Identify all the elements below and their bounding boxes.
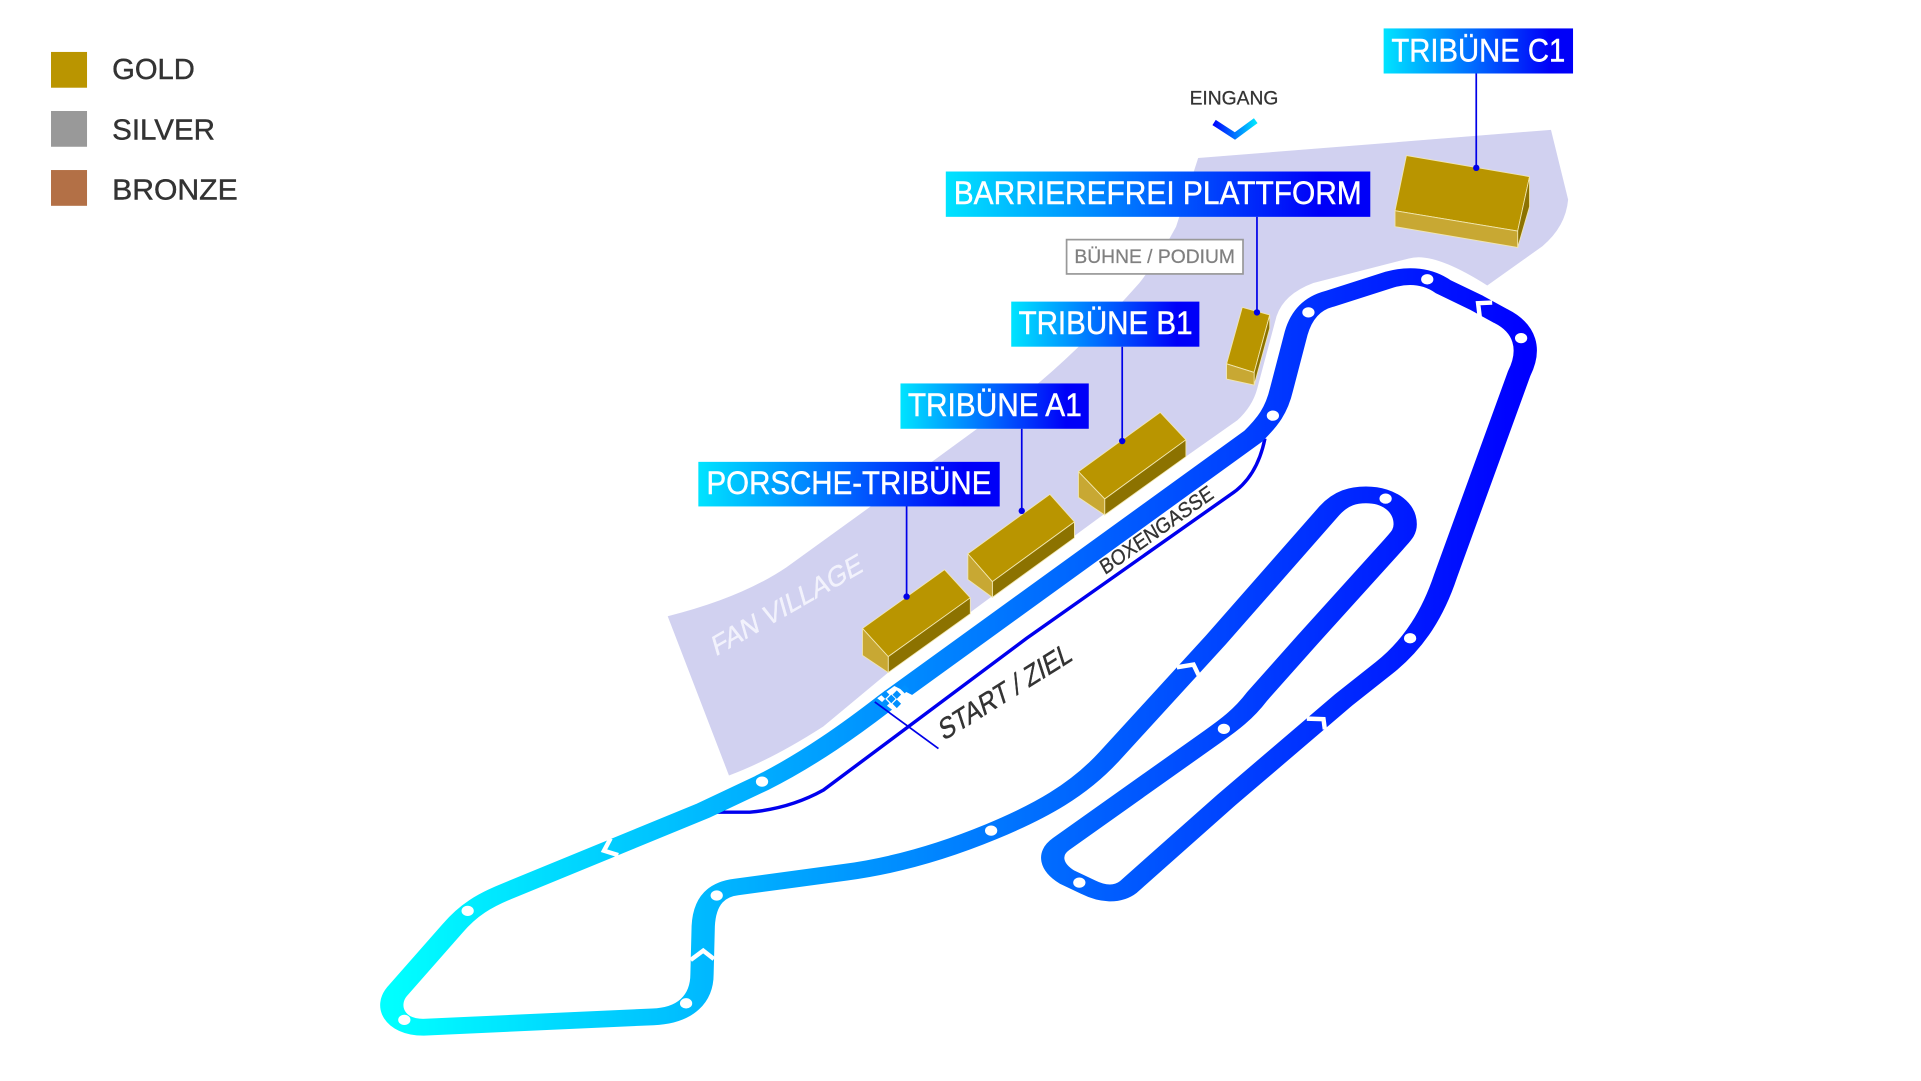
legend item: gold — [51, 52, 195, 88]
text: eingang: EINGANG — [1190, 89, 1278, 110]
label: porsche-tribüne — [698, 462, 1000, 600]
grandstand: a1 — [968, 494, 1074, 597]
text: boxengasse: BOXENGASSE — [1096, 481, 1217, 580]
label: barrierefrei plattform — [946, 172, 1370, 316]
entrance — [1190, 89, 1278, 136]
legend item: bronze — [51, 170, 238, 206]
icon: entrance chevron — [1214, 121, 1256, 136]
legend item: silver: SILVER — [112, 114, 215, 146]
arrow: back straight — [1307, 719, 1325, 729]
turn markers — [398, 274, 1527, 1025]
race track — [392, 277, 1525, 1027]
text: start / ziel: START / ZIEL — [936, 636, 1075, 748]
label: tribüne b1 — [1011, 302, 1199, 444]
arrow: inner straight — [1177, 665, 1199, 675]
label: tribüne a1: TRIBÜNE A1 — [908, 387, 1082, 423]
grandstand: b1 — [1078, 412, 1186, 515]
label: tribüne a1 — [900, 383, 1089, 514]
start finish flag — [877, 685, 914, 711]
legend — [51, 52, 238, 206]
arrow: left straight — [604, 838, 618, 855]
stage label — [1067, 240, 1243, 274]
pit lane — [717, 439, 1265, 812]
grandstand: accessible platform — [1227, 307, 1270, 385]
start line marker — [875, 702, 938, 749]
label: barrierefrei plattform: BARRIEREFREI PLATTFORM — [954, 175, 1362, 211]
legend item: gold: GOLD — [112, 54, 195, 86]
arrow: top corner — [1478, 303, 1492, 319]
arrow: lower chicane — [691, 951, 714, 960]
direction arrows — [604, 303, 1492, 960]
grandstand: c1 — [1395, 156, 1530, 247]
label: tribüne c1 — [1384, 28, 1573, 171]
label: porsche-tribüne: PORSCHE-TRIBÜNE — [707, 465, 991, 501]
label: tribüne c1: TRIBÜNE C1 — [1391, 33, 1565, 69]
legend item: silver — [51, 111, 215, 147]
text: fan village: FAN VILLAGE — [708, 546, 866, 662]
label: tribüne b1: TRIBÜNE B1 — [1019, 305, 1193, 341]
fan village area — [668, 130, 1568, 775]
stage label: BÜHNE / PODIUM — [1074, 246, 1235, 268]
legend item: bronze: BRONZE — [112, 174, 238, 206]
grandstand: porsche — [862, 570, 970, 673]
